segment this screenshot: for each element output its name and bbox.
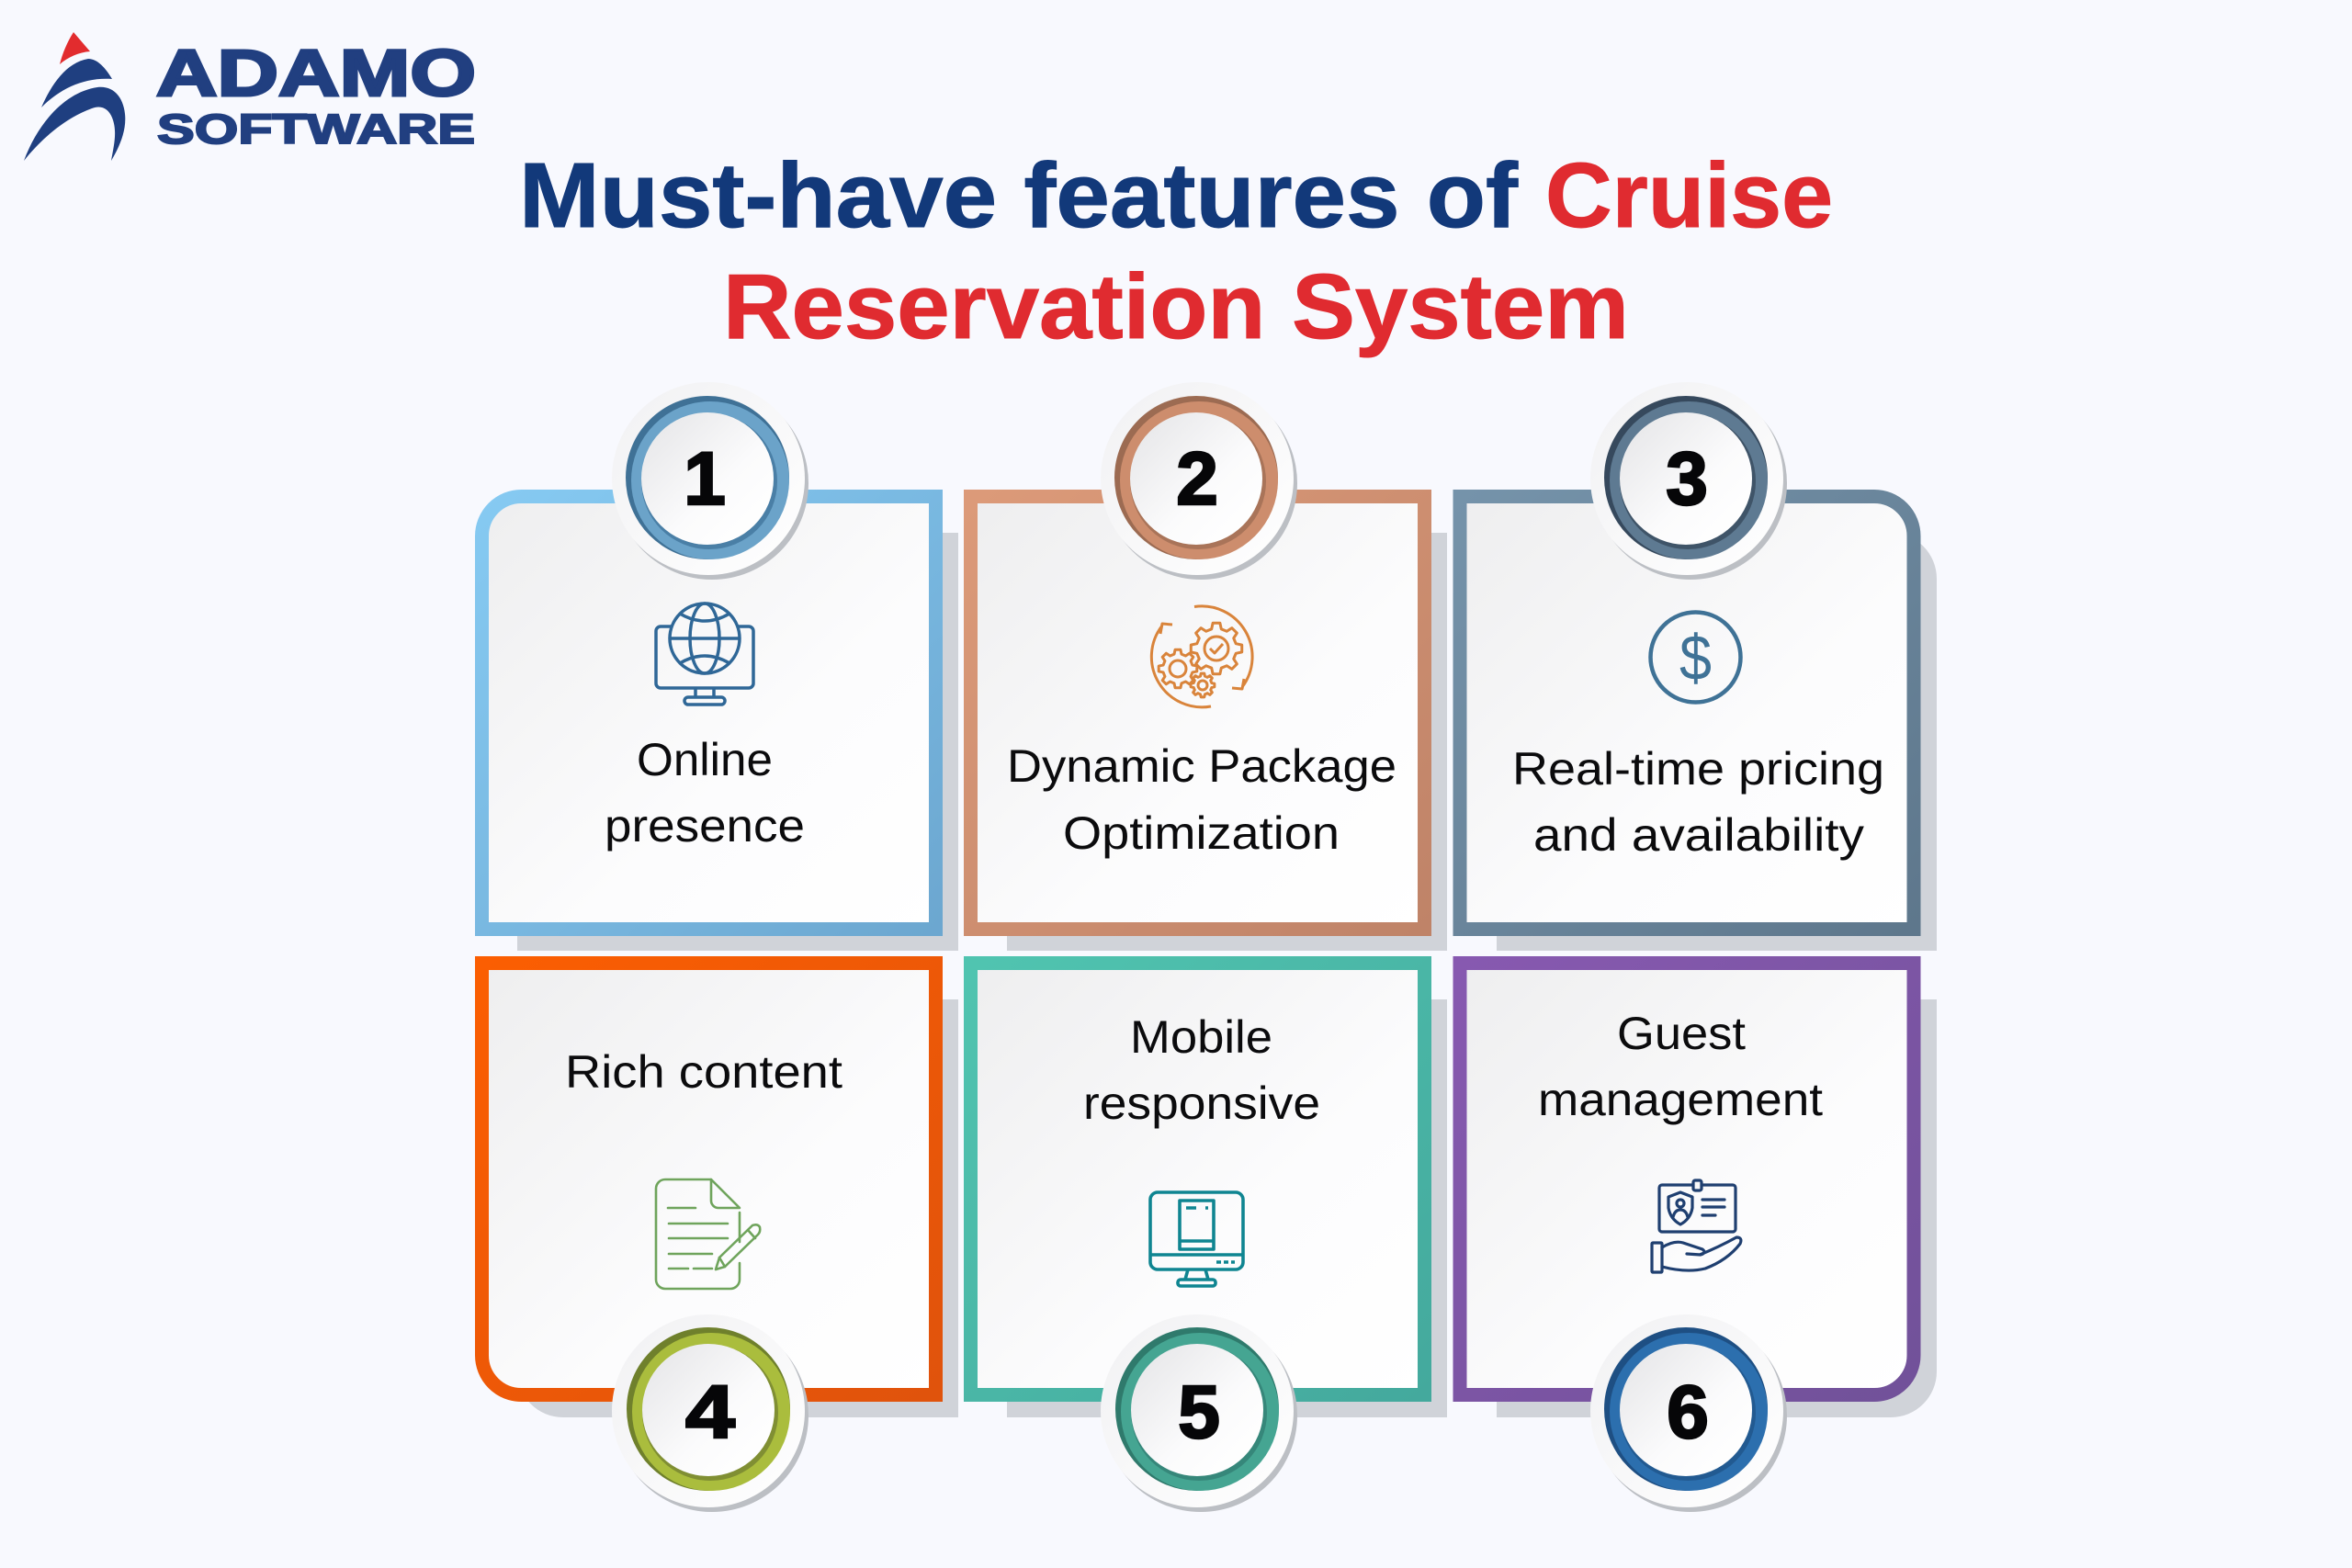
label: [1083, 1011, 1320, 1129]
number badge 5: [1101, 1314, 1297, 1512]
number badge 4: 4: [685, 1371, 735, 1454]
icon: dollar coin: $: [1679, 622, 1712, 694]
label: responsive: [1083, 1077, 1320, 1129]
icon: gears with cycle arrows: [1151, 606, 1252, 707]
panel shadow: [517, 999, 958, 1417]
panel shadow: [1007, 999, 1447, 1417]
panel 1: Online presence: [481, 382, 958, 951]
title: Cruise: [1545, 144, 1833, 247]
label: presence: [605, 800, 805, 852]
number badge 3: 3: [1666, 437, 1708, 521]
panel frame: [1460, 496, 1914, 930]
label: Dynamic Package: [1007, 740, 1396, 792]
label: Real-time pricing: [1512, 743, 1884, 795]
number badge 4: [612, 1314, 808, 1512]
logo wordmark: SOFTWARE: [157, 106, 475, 152]
icon: monitor with phone: [1150, 1192, 1243, 1286]
number badge 6: 6: [1667, 1371, 1709, 1454]
panel 5: Mobile responsive: [970, 963, 1447, 1512]
label: [1512, 743, 1884, 861]
number badge 5: 5: [1178, 1371, 1220, 1454]
panel 2: Dynamic Package Optimization: [970, 382, 1447, 951]
number badge 6: [1590, 1314, 1787, 1512]
label: and availability: [1533, 809, 1864, 861]
panel frame: [481, 963, 935, 1394]
label: Guest: [1617, 1008, 1746, 1059]
title: Reservation System: [723, 255, 1629, 358]
number badge 3: [1590, 382, 1787, 580]
label: management: [1538, 1074, 1823, 1125]
icon: globe on monitor: [656, 604, 753, 705]
panel frame: [970, 963, 1424, 1394]
panel frame: [1460, 963, 1914, 1394]
label: Rich content: [565, 1046, 842, 1098]
number badge 1: 1: [684, 437, 726, 521]
label: [1538, 1008, 1823, 1125]
logo mark: [24, 32, 125, 161]
logo: Adamo Software: [24, 32, 476, 161]
label: Optimization: [1063, 807, 1340, 859]
logo wordmark: ADAMO: [156, 38, 476, 110]
panel shadow: [1007, 533, 1447, 951]
logo wordmark: [156, 38, 476, 152]
label: [1007, 740, 1396, 859]
label: [605, 734, 805, 852]
panel frame: [481, 496, 935, 930]
icon: dollar coin: [1650, 612, 1740, 702]
title: [519, 144, 1833, 358]
number badge 2: [1101, 382, 1297, 580]
title: Must-have features of: [519, 144, 1519, 247]
panel shadow: [517, 533, 958, 951]
number badge 1: [612, 382, 808, 580]
number badge 2: 2: [1176, 437, 1218, 521]
label: Online: [637, 734, 773, 785]
panel 6: Guest management: [1460, 963, 1937, 1512]
panel shadow: [1497, 533, 1937, 951]
label: Mobile: [1130, 1011, 1272, 1063]
panel 4: Rich content: [481, 963, 958, 1512]
panel 3: Real-time pricing and availability: [1460, 382, 1937, 951]
panel frame: [970, 496, 1424, 930]
icon: ID card on hand: [1652, 1180, 1741, 1272]
icon: document with pen: [656, 1179, 760, 1289]
panel shadow: [1497, 999, 1937, 1417]
